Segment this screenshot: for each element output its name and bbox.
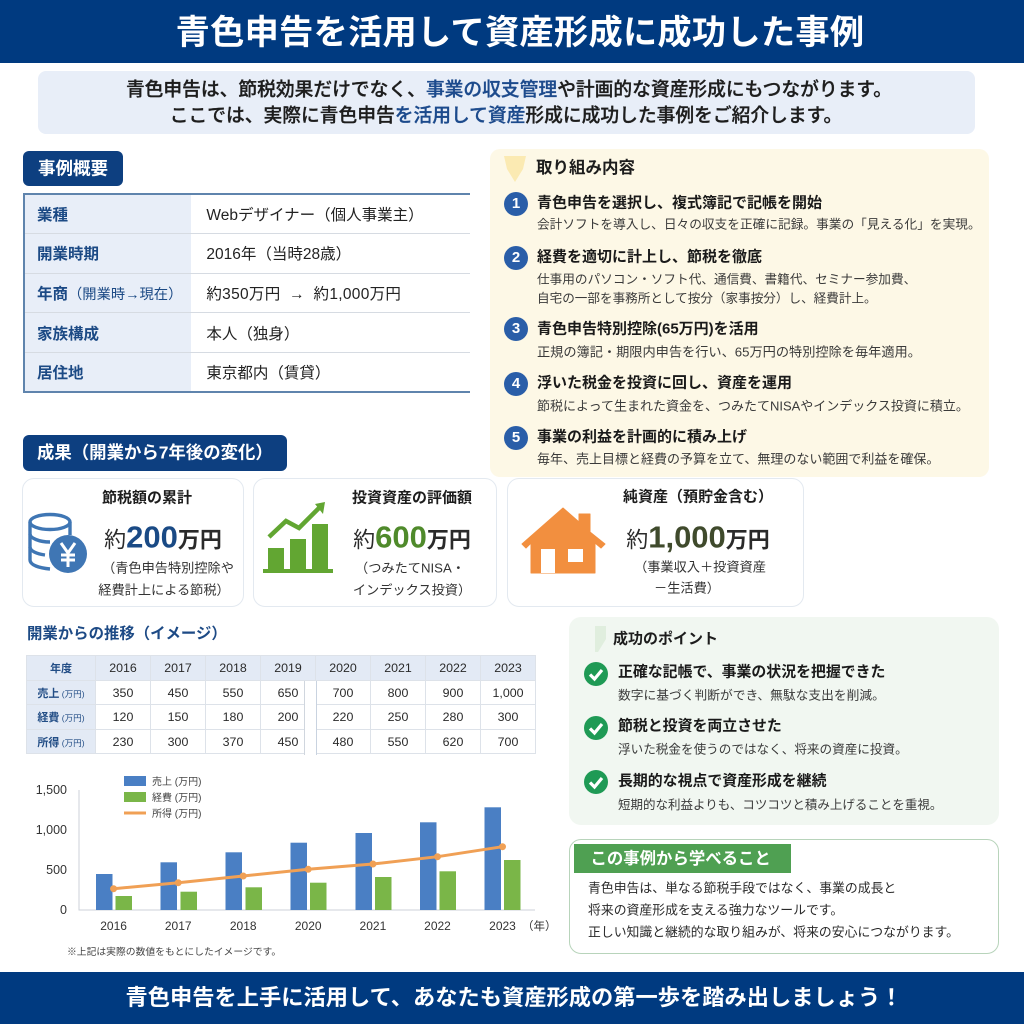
table: case overview: 東京都内（賃貸） [206, 365, 330, 382]
table: case overview: 居住地 [37, 365, 84, 382]
step 1: 1 [512, 195, 520, 212]
header banner [0, 0, 1024, 63]
step 2 [504, 246, 916, 306]
table: yearly trend: 2022 [439, 661, 467, 675]
actions heading: 取り組み内容 [536, 159, 635, 177]
point 1 [584, 662, 885, 703]
chart: sales, expenses, income: 売上 (万円) [152, 775, 201, 788]
note: （青色申告特別控除や [102, 560, 234, 575]
table: yearly trend: 200 [278, 710, 298, 724]
note line 2: 経費計上による節税） [98, 582, 230, 597]
step 2: 自宅の一部を事務所として按分（家事按分）し、経費計上。 [537, 292, 877, 306]
chart: sales, expenses, income: 2017 [165, 919, 192, 933]
table: yearly trend: 650 [278, 686, 298, 700]
chart: sales, expenses, income [36, 775, 555, 958]
table: case overview: 家族構成 [37, 326, 99, 343]
title: 青色申告を活用して資産形成に成功した事例 [176, 14, 864, 52]
step 3: 青色申告特別控除(65万円)を活用 [537, 320, 759, 338]
point 2: 節税と投資を両立させた [618, 719, 782, 735]
card: tax savings [22, 478, 244, 607]
card: investment [253, 478, 497, 607]
table: yearly trend: 2018 [219, 661, 247, 675]
table: yearly trend: 年度 [50, 663, 72, 675]
step 2: 2 [512, 249, 520, 266]
chart: sales, expenses, income: 500 [46, 863, 67, 877]
table: case overview: 約350万円 → 約1,000万円 [206, 286, 401, 303]
lessons text [588, 881, 959, 940]
footer banner [0, 972, 1024, 1024]
table: yearly trend: 370 [223, 734, 243, 748]
value: 約600万円 [353, 520, 471, 554]
lessons heading: この事例から学べること [590, 849, 771, 867]
intro line 1: 青色申告は、節税効果だけでなく、事業の収支管理や計画的な資産形成にもつながります。 [126, 79, 892, 100]
table: yearly trend: 220 [333, 710, 353, 724]
lessons text: 将来の資産形成を支える強力なツールです。 [588, 903, 843, 918]
intro box [38, 71, 975, 134]
step 3: 3 [512, 320, 520, 337]
chart: sales, expenses, income: 2016 [100, 919, 127, 933]
step 5: 5 [512, 429, 520, 446]
card title: 投資資産の評価額 [352, 490, 472, 506]
table: yearly trend: 2021 [384, 661, 412, 675]
table: yearly trend: 700 [333, 686, 353, 700]
point 1: 数字に基づく判断ができ、無駄な支出を削減。 [618, 688, 885, 703]
table: yearly trend: 900 [443, 686, 463, 700]
heading: trend: 開業からの推移（イメージ） [27, 625, 227, 642]
table: yearly trend: 2017 [164, 661, 192, 675]
table: yearly trend [26, 655, 536, 754]
footer message: 青色申告を上手に活用して、あなたも資産形成の第一歩を踏み出しましょう！ [126, 985, 902, 1010]
step 5 [504, 426, 939, 466]
table: yearly trend: 150 [168, 710, 188, 724]
table: yearly trend: 2023 [494, 661, 522, 675]
lessons text: 正しい知識と継続的な取り組みが、将来の安心につながります。 [588, 925, 959, 940]
step 4: 浮いた税金を投資に回し、資産を運用 [537, 374, 792, 392]
point 2: 浮いた税金を使うのではなく、将来の資産に投資。 [618, 743, 908, 757]
table: yearly trend: 550 [388, 734, 408, 748]
table: yearly trend: 480 [333, 734, 353, 748]
step 1 [504, 192, 981, 232]
card: net assets [507, 478, 804, 607]
table: yearly trend: 230 [113, 734, 133, 748]
lessons heading [574, 844, 790, 872]
chart: sales, expenses, income: 2020 [295, 919, 322, 933]
point 3: 長期的な視点で資産形成を継続 [618, 774, 826, 790]
point 1: 正確な記帳で、事業の状況を把握できた [618, 665, 885, 681]
point 3: 短期的な利益よりも、コツコツと積み上げることを重視。 [618, 798, 942, 812]
table: yearly trend: 2016 [109, 661, 137, 675]
points heading: 成功のポイント [613, 630, 718, 648]
chart: sales, expenses, income: ※上記は実際の数値をもとにしたイメージです。 [67, 945, 281, 958]
point 3 [584, 770, 942, 812]
icon: green pennant [595, 626, 606, 652]
lessons text: 青色申告は、単なる節税手段ではなく、事業の成長と [588, 881, 896, 896]
heading: case overview [23, 151, 123, 186]
value: 約1,000万円 [626, 520, 770, 554]
table: case overview: 開業時期 [37, 246, 99, 263]
table: yearly trend: 売上 (万円) [37, 688, 85, 700]
step 5: 事業の利益を計画的に積み上げ [537, 428, 747, 446]
chart: sales, expenses, income: 経費 (万円) [152, 791, 201, 804]
table: yearly trend: 450 [278, 734, 298, 748]
icon: coins and yen [28, 512, 87, 573]
table: yearly trend: 2019 [274, 661, 302, 675]
chart: sales, expenses, income: 2018 [230, 919, 257, 933]
note: （つみたてNISA・ [355, 560, 465, 575]
table: yearly trend: 300 [168, 734, 188, 748]
point 2 [584, 716, 908, 757]
panel: success points [569, 617, 999, 825]
chart: sales, expenses, income: 2022 [424, 919, 451, 933]
table: yearly trend: 300 [498, 710, 518, 724]
step 1: 青色申告を選択し、複式簿記で記帳を開始 [537, 194, 822, 212]
icon: yellow pennant [504, 156, 526, 182]
table: yearly trend: 620 [443, 734, 463, 748]
table: yearly trend: 280 [443, 710, 463, 724]
step 4 [504, 372, 969, 414]
table: yearly trend: 180 [223, 710, 243, 724]
table: yearly trend: 450 [168, 686, 188, 700]
panel: lessons [569, 839, 999, 954]
table: yearly trend: 550 [223, 686, 243, 700]
table: yearly trend: 700 [498, 734, 518, 748]
step 3: 正規の簿記・期限内申告を行い、65万円の特別控除を毎年適用。 [537, 344, 921, 359]
chart: sales, expenses, income: 0 [60, 903, 67, 917]
card title: 節税額の累計 [102, 490, 192, 506]
step 5: 毎年、売上目標と経費の予算を立て、無理のない範囲で利益を確保。 [537, 452, 939, 466]
note: （事業収入＋投資資産 [634, 559, 766, 574]
note line 2: －生活費） [654, 580, 720, 595]
step 2: 仕事用のパソコン・ソフト代、通信費、書籍代、セミナー参加費、 [537, 273, 916, 287]
table: case overview: 業種 [37, 207, 68, 224]
chart: sales, expenses, income: 2023 [489, 919, 516, 933]
table: yearly trend: 350 [113, 686, 133, 700]
step 4: 4 [512, 375, 520, 392]
icon: house [522, 508, 606, 574]
chart: sales, expenses, income: 1,000 [36, 823, 67, 837]
panel: actions [490, 149, 989, 477]
chart: sales, expenses, income: 2021 [360, 919, 387, 933]
table: case overview [23, 193, 470, 393]
table: yearly trend: 1,000 [492, 686, 524, 700]
step 3 [504, 317, 921, 359]
step 4: 節税によって生まれた資金を、つみたてNISAやインデックス投資に積立。 [537, 398, 969, 414]
value: 約200万円 [104, 520, 222, 554]
heading: results: 成果（開業から7年後の変化） [37, 442, 273, 462]
table: yearly trend: 250 [388, 710, 408, 724]
note line 2: インデックス投資） [353, 582, 471, 597]
table: yearly trend: 経費 (万円) [37, 712, 85, 724]
table: yearly trend: 800 [388, 686, 408, 700]
step 1: 会計ソフトを導入し、日々の収支を正確に記録。事業の「見える化」を実現。 [537, 218, 981, 232]
table: case overview: 2016年（当時28歳） [206, 246, 351, 263]
table: case overview: 本人（独身） [206, 326, 299, 343]
table: yearly trend: 所得 (万円) [37, 736, 85, 748]
chart: sales, expenses, income: 所得 (万円) [152, 807, 201, 820]
heading: case overview: 事例概要 [38, 158, 108, 178]
card title: 純資産（預貯金含む） [623, 488, 773, 506]
intro line 2: ここでは、実際に青色申告を活用して資産形成に成功した事例をご紹介します。 [170, 105, 842, 126]
table: yearly trend: 2020 [329, 661, 357, 675]
icon: growth chart [263, 502, 333, 573]
heading: results [23, 435, 287, 471]
table: yearly trend: 120 [113, 710, 133, 724]
table: case overview: Webデザイナー（個人事業主） [206, 207, 424, 224]
table: case overview: 年商（開業時→現在） [37, 286, 182, 303]
chart: sales, expenses, income: 1,500 [36, 783, 67, 797]
step 2: 経費を適切に計上し、節税を徹底 [537, 248, 762, 266]
